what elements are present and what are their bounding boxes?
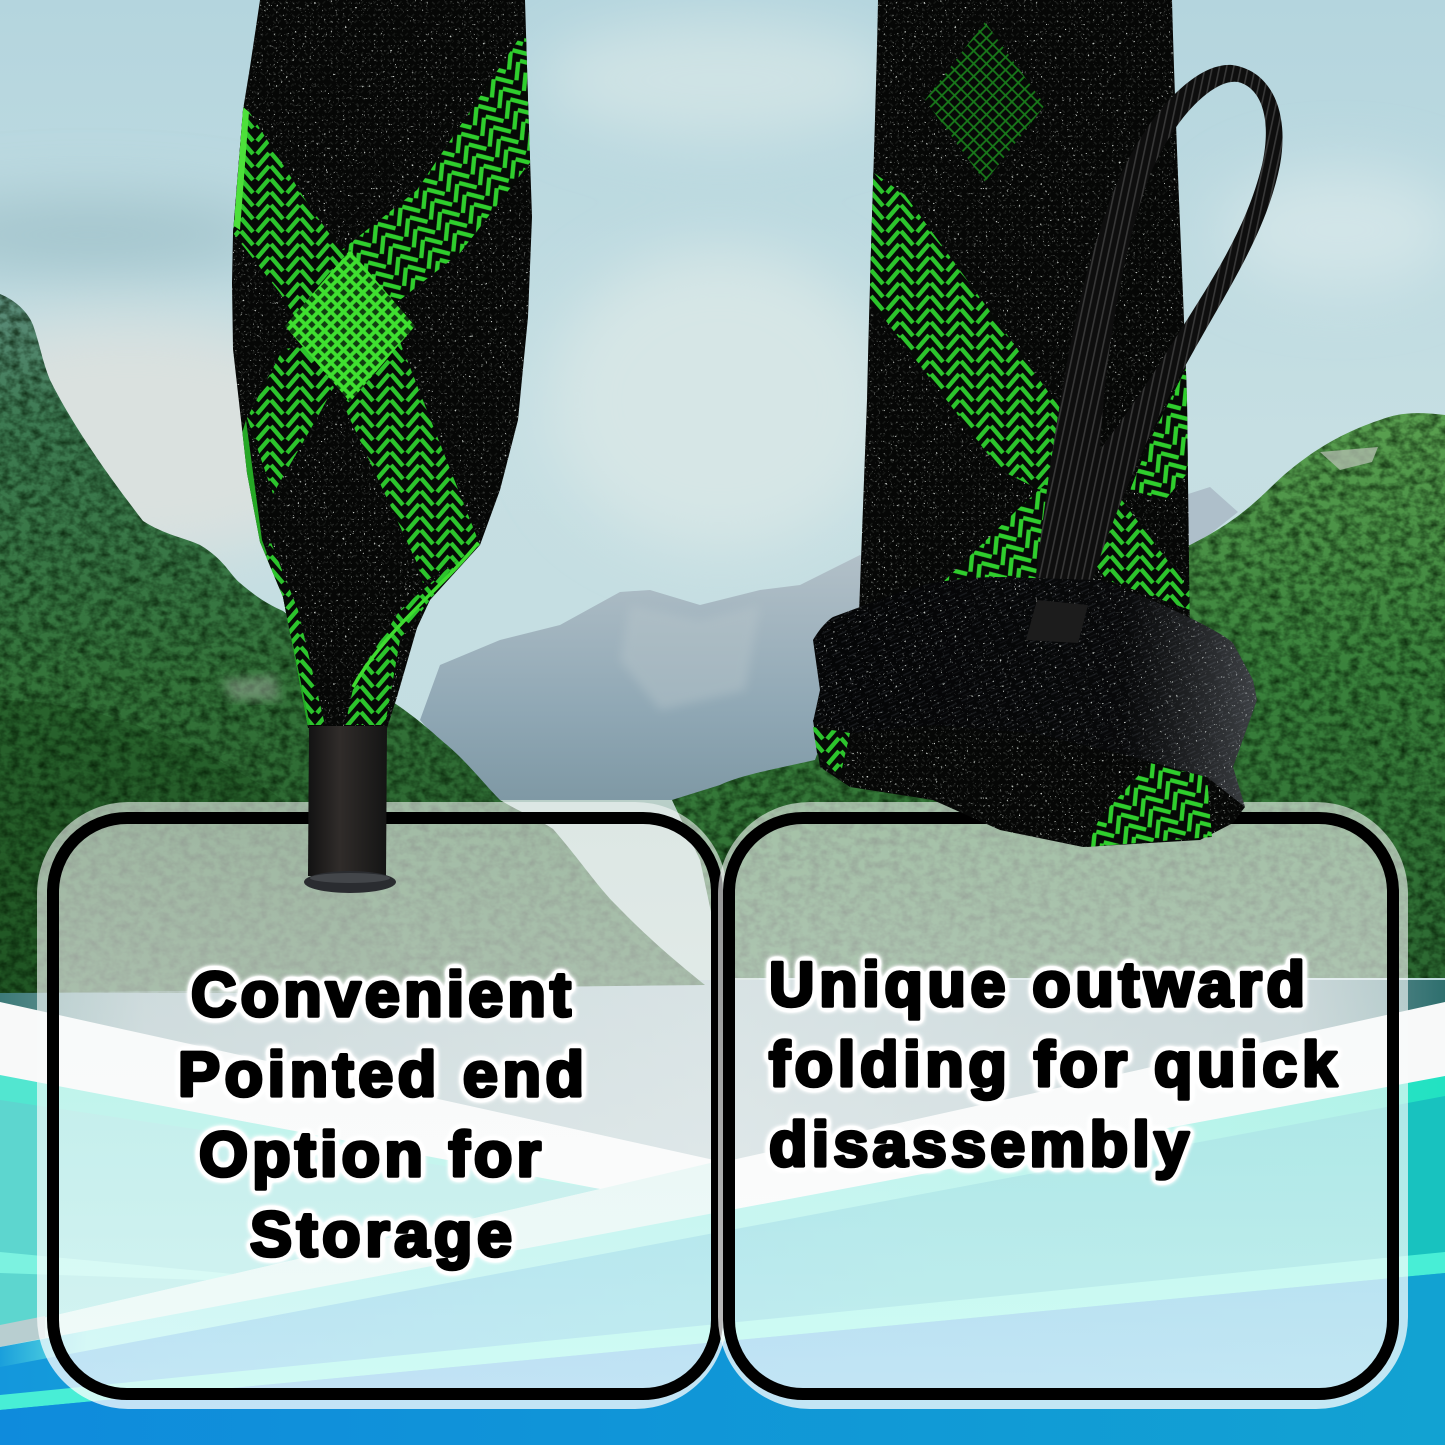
green X pattern [232, 37, 532, 725]
heat-shrink tip [308, 726, 387, 876]
sleeve body [232, 0, 532, 728]
elastic loop [1028, 65, 1283, 640]
wave: bright teal band [0, 1076, 1445, 1445]
product: outward folded sleeve [813, 0, 1283, 847]
water [0, 980, 1445, 1280]
green band pattern [870, 22, 1190, 610]
wave: teal band [0, 1096, 1445, 1445]
text: right feature caption [769, 950, 1338, 1180]
wave: blue band [0, 1273, 1445, 1445]
text: left feature caption: Pointed end [178, 1040, 584, 1110]
text: right feature caption: folding for quick [769, 1030, 1338, 1100]
elastic knot [1026, 600, 1088, 643]
mountain right [672, 413, 1445, 978]
text: left feature caption: Storage [250, 1200, 512, 1270]
inner opening [813, 715, 1245, 847]
mountain left [0, 294, 705, 993]
wave: white band [0, 1002, 1445, 1445]
text: left feature caption [178, 960, 584, 1270]
wave: soft band under wedge [0, 1160, 723, 1347]
panel: left feature card [37, 802, 727, 1409]
mountains [0, 294, 1445, 993]
text: right feature caption: disassembly [769, 1110, 1189, 1180]
product: pointed sleeve end [232, 0, 532, 893]
text: left feature caption: Option for [199, 1120, 541, 1190]
text: left feature caption: Convenient [191, 960, 571, 1030]
clouds [0, 20, 1445, 560]
text: right feature caption: Unique outward [769, 950, 1305, 1020]
wave: light strip [0, 1252, 1445, 1410]
folded cuff [813, 577, 1257, 807]
hazy far hill [500, 800, 760, 985]
sleeve body [858, 0, 1190, 640]
distant cliffs [420, 555, 1100, 810]
wave: left teal wedge [0, 1075, 600, 1328]
panel: right feature card [718, 802, 1408, 1409]
